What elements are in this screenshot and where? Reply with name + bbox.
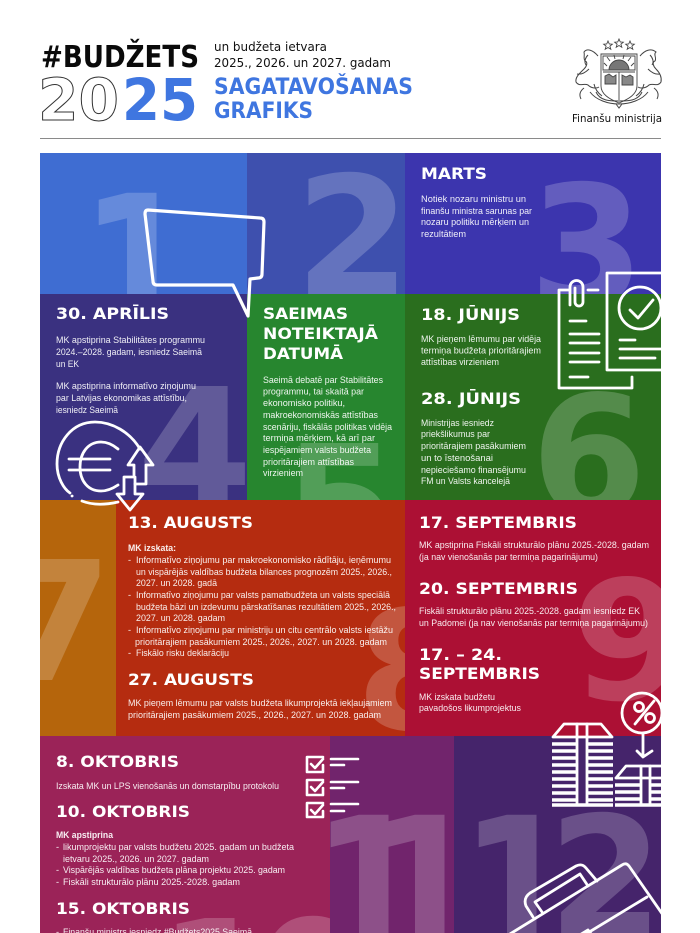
heading — [263, 304, 379, 363]
text: termiņa mērķiem, kā arī par — [263, 433, 375, 443]
number 7: 7 — [0, 527, 113, 720]
number 1: 1 — [80, 154, 196, 386]
text: 13 August list: MK izskata: — [128, 543, 176, 553]
panel: month 10, OKTOBRIS — [40, 736, 330, 933]
text: Saeimā debatē par Stabilitātes — [263, 375, 383, 385]
panel: month 12 — [454, 736, 664, 933]
text: 28 June: FM un Valsts kancelejā — [421, 476, 511, 486]
text: 28 June: priekšlikumus par — [421, 429, 490, 439]
text: 10 October list: - — [56, 842, 59, 852]
title: #BUDŽETS: #BUDŽETS — [41, 39, 199, 75]
heading: DATUMĀ — [263, 343, 344, 363]
subtitle — [214, 40, 391, 70]
text: 13 August list: - — [128, 625, 131, 635]
text: 28 June: prioritārajiem pasākumiem — [421, 441, 526, 451]
heading: 17. – 24. SEPTEMBRIS: 17. – 24. — [419, 645, 502, 664]
icon: briefcase — [510, 864, 663, 933]
text — [421, 194, 532, 239]
text: virzieniem — [263, 468, 303, 478]
text: 13 August list: 2027. un 2028. gadā — [136, 578, 218, 588]
logo: national coat of arms and ministry name — [572, 39, 662, 125]
heading: NOTEIKTAJĀ — [263, 323, 379, 343]
text: makroekonomiskās attīstības — [263, 410, 378, 420]
panel: month 7 — [40, 500, 116, 736]
heading: 30. APRĪLIS — [56, 303, 169, 323]
header divider — [40, 138, 661, 139]
text: un EK — [56, 359, 80, 369]
heading: 13. AUGUSTS: 13. AUGUSTS — [128, 513, 253, 532]
text: 18 June — [421, 334, 542, 367]
text: 13 August list: 2027. un 2028. gadam — [136, 613, 225, 623]
panel: month 4, 30. APRĪLIS — [40, 294, 247, 500]
number 9: 9 — [572, 546, 688, 739]
icon: coat of arms — [576, 39, 661, 108]
number 12 — [478, 812, 649, 933]
panel: month 5, SAEIMAS NOTEIKTAJĀ DATUMĀ — [247, 294, 405, 500]
text: 17-24 September: MK izskata budžetu — [419, 692, 495, 702]
heading: 10. OKTOBRIS: 10. OKTOBRIS — [56, 802, 190, 821]
panel: month 2 — [247, 153, 405, 294]
panel: month 6, JŪNIJS — [405, 294, 661, 500]
text: par Latvijas ekonomikas attīstību, — [56, 393, 187, 403]
icon: money stacks with percent — [552, 693, 663, 805]
icon: euro with arrows — [57, 422, 153, 510]
text: MK apstiprina informatīvo ziņojumu — [56, 381, 196, 391]
text: prioritārajiem attīstības — [263, 457, 354, 467]
ministry name: Finanšu ministrija — [572, 113, 662, 125]
number 10 — [176, 916, 330, 933]
text: 8 October: Izskata MK un LPS vienošanās un domstarpību protokolu — [56, 781, 279, 791]
icon: documents with paperclip and check — [559, 273, 663, 388]
text: 28 June: un to īstenošanai — [421, 453, 493, 463]
text: 10 October list: Fiskāli strukturālo plānu 2025.-2028. gadam — [63, 877, 240, 887]
number 8: 8 — [356, 576, 472, 769]
text: 13 August list: un vispārējās valdības budžeta bilances prognozēm 2025., 2026., — [136, 567, 392, 577]
text: rezultātiem — [421, 229, 466, 239]
text: 13 August list: Informatīvo ziņojumu par ministriju un citu centrālo valsts iestāžu — [136, 625, 393, 635]
text: 18 June: MK pieņem lēmumu par vidēja — [421, 334, 542, 344]
text: 27 August: MK pieņem lēmumu par valsts budžeta likumprojektā iekļaujamiem — [128, 698, 392, 708]
panel: month 9, SEPTEMBRIS — [405, 500, 661, 736]
blue heading: GRAFIKS — [214, 99, 313, 124]
text: 17 September: MK apstiprina Fiskāli strukturālo plānu 2025.-2028. gadam — [419, 540, 649, 550]
text: 13 August list: prioritārajiem pasākumiem 2025., 2026., 2027. un 2028. gadam — [135, 637, 387, 647]
icon: speech bubble — [145, 210, 264, 316]
heading: 27. AUGUSTS: 27. AUGUSTS — [128, 670, 254, 689]
text: 10 October list: MK apstiprina — [56, 830, 114, 840]
text: 28 June — [421, 418, 526, 486]
text block: October dates — [56, 752, 295, 933]
text: 10 October list — [56, 830, 295, 887]
text: 13 August list: Informatīvo ziņojumu par makroekonomisko rādītāju, ieņēmumu — [136, 555, 391, 565]
blue heading: SAGATAVOŠANAS — [214, 74, 413, 100]
blue heading — [214, 74, 413, 124]
text: 2024.–2028. gadam, iesniedz Saeimā — [56, 347, 203, 357]
text: ekonomisko politiku, — [263, 398, 345, 408]
text: 18 June: termiņa budžeta prioritārajiem — [421, 346, 541, 356]
text: programmu, tai skaitā par — [263, 386, 364, 396]
text: iespējamiem valsts budžeta — [263, 445, 372, 455]
number 4: 4 — [137, 354, 253, 547]
heading: 8. OKTOBRIS: 8. OKTOBRIS — [56, 752, 179, 771]
heading: 20. SEPTEMBRIS: 20. SEPTEMBRIS — [419, 579, 578, 598]
heading: 17. – 24. SEPTEMBRIS — [419, 645, 540, 683]
heading: 28. JŪNIJS: 28. JŪNIJS — [421, 388, 521, 408]
text: 13 August list — [128, 543, 396, 658]
text: scenāriju, fiskālās politikas vidēja — [263, 422, 393, 432]
subtitle: un budžeta ietvara — [214, 40, 327, 54]
heading: 15. OKTOBRIS: 15. OKTOBRIS — [56, 899, 190, 918]
text — [56, 335, 205, 415]
text: nozaru politiku mērķiem un — [421, 217, 529, 227]
text: 28 June: Ministrijas iesniedz — [421, 418, 494, 428]
text: Notiek nozaru ministru un — [421, 194, 526, 204]
text — [263, 375, 393, 478]
text: 13 August list: - — [128, 555, 131, 565]
text: 20 September — [419, 606, 648, 628]
outlined year digits: 20 — [38, 66, 119, 134]
text: 13 August list: budžeta bāzi un izdevumu pārskatīšanas rezultātiem 2025., 2026., — [136, 602, 396, 612]
text: 13 August list: - — [128, 648, 131, 658]
heading: 17. SEPTEMBRIS: 17. SEPTEMBRIS — [419, 513, 577, 532]
text: finanšu ministra sarunas par — [421, 206, 532, 216]
text: 10 October list: - — [56, 877, 59, 887]
text: MK apstiprina Stabilitātes programmu — [56, 335, 205, 345]
blue year digits: 25 — [122, 66, 198, 134]
number 2: 2 — [295, 142, 411, 335]
heading: 18. JŪNIJS: 18. JŪNIJS — [421, 304, 520, 324]
panel: month 3, MARTS — [405, 153, 661, 294]
text: 20 September: Fiskāli strukturālo plānu 2025.-2028. gadam iesniedz EK — [419, 606, 641, 616]
number 5: 5 — [283, 411, 399, 604]
text: 28 June: nepieciešamo finansējumu — [421, 465, 526, 475]
text: 10 October list: - — [56, 865, 59, 875]
text: 13 August list: Informatīvo ziņojumu par valsts pamatbudžeta un valsts speciālā — [136, 590, 391, 600]
text: 10 October list: likumprojektu par valsts budžetu 2025. gadam un budžeta — [63, 842, 295, 852]
text: 13 August list: - — [128, 590, 131, 600]
text: 18 June: attīstības virzieniem — [421, 357, 499, 367]
text: 17-24 September — [419, 692, 521, 713]
heading: 17. – 24. SEPTEMBRIS: SEPTEMBRIS — [419, 664, 540, 683]
icon: checklist — [307, 757, 358, 817]
text: 17-24 September: pavadošos likumprojektus — [419, 703, 521, 713]
text: 17 September — [419, 540, 649, 562]
number 11 — [330, 814, 444, 933]
text: 13 August list: Fiskālo risku deklarāciju — [136, 648, 229, 658]
text: 10 October list: Vispārējās valdības budžeta plāna projektu 2025. gadam — [63, 865, 285, 875]
number 6: 6 — [531, 361, 647, 554]
number 3: 3 — [529, 151, 645, 344]
text: 20 September: un Padomei (ja nav vienošanās par termiņa pagarinājumu) — [419, 618, 648, 628]
text: 10 October list: ietvaru 2025., 2026. un 2027. gadam — [63, 854, 209, 864]
text: 27 August — [128, 698, 392, 720]
heading: MARTS — [421, 164, 487, 183]
subtitle: 2025., 2026. un 2027. gadam — [214, 56, 391, 70]
text: 17 September: (ja nav vienošanās par termiņa pagarinājumu) — [419, 552, 598, 562]
text: 27 August: prioritārajiem pasākumiem 2025., 2026., 2027. un 2028. gadam — [128, 710, 381, 720]
panel: month 1 — [40, 153, 247, 294]
panel: month 11 — [330, 736, 454, 933]
text: iesniedz Saeimā — [56, 405, 119, 415]
header title block — [38, 39, 413, 134]
heading: SAEIMAS — [263, 304, 348, 323]
panel: month 8, AUGUSTS — [116, 500, 405, 736]
